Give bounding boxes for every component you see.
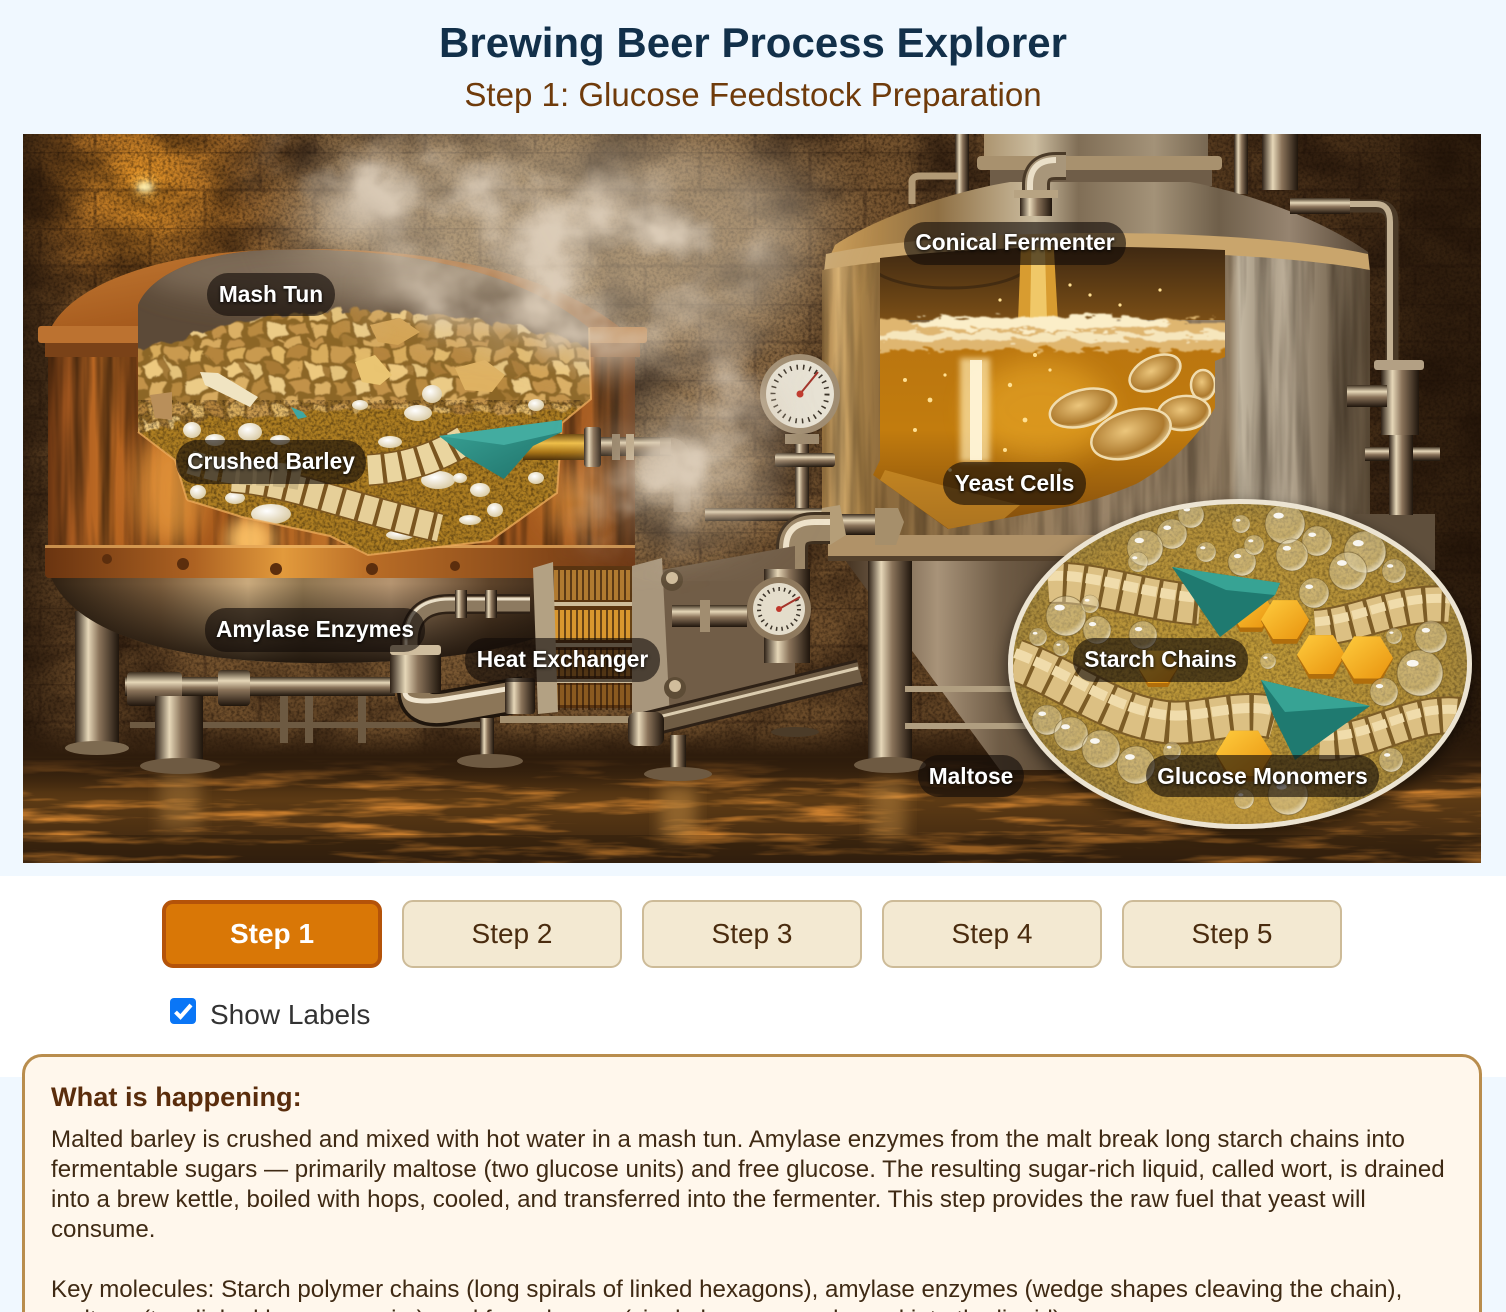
lower rivet band bbox=[45, 545, 635, 578]
panel body text: into a brew kettle, boiled with hops, cooled, and transferred into the fermenter. This step provides the raw fuel that yeast will bbox=[51, 1186, 1366, 1213]
label: Heat Exchanger bbox=[465, 638, 660, 682]
chain 3 bbox=[1015, 653, 1275, 723]
button: Step 4: Step 4 bbox=[952, 918, 1032, 949]
fermenter cone bbox=[845, 560, 1230, 770]
button: Step 1 active bbox=[162, 900, 382, 968]
white pebbles bbox=[183, 385, 544, 540]
background: brick wall bbox=[23, 134, 1481, 784]
label: Crushed Barley bbox=[176, 440, 366, 484]
label: Glucose Monomers: Glucose Monomers bbox=[1157, 763, 1368, 789]
mash window rim highlight bbox=[138, 328, 591, 555]
copper body bbox=[48, 352, 635, 555]
bubbles bbox=[1029, 502, 1447, 815]
panel body text: Key molecules: Starch polymer chains (long spirals of linked hexagons), amylase enzymes (wedge shapes cleaving the chain), bbox=[51, 1276, 1402, 1303]
stainless bowl bbox=[50, 575, 610, 663]
button: Step 3: Step 3 bbox=[712, 918, 792, 949]
label: Heat Exchanger: Heat Exchanger bbox=[477, 646, 648, 672]
label: Yeast Cells bbox=[943, 462, 1086, 505]
lens shadow and ring bbox=[1008, 499, 1472, 829]
subtitle: Step 1: Glucose Feedstock Preparation bbox=[464, 77, 1042, 114]
title: Brewing Beer Process Explorer bbox=[439, 19, 1067, 66]
panel body text: consume. bbox=[51, 1216, 155, 1243]
label: Amylase Enzymes bbox=[205, 608, 425, 652]
yeast cells bbox=[1048, 353, 1215, 461]
crushed barley bed bbox=[138, 306, 591, 434]
label: Crushed Barley: Crushed Barley bbox=[187, 448, 355, 474]
heat exchanger bbox=[533, 546, 795, 724]
enzyme wedges bbox=[1172, 567, 1370, 760]
panel heading: What is happening: bbox=[51, 1081, 302, 1112]
label: Glucose Monomers bbox=[1146, 755, 1379, 797]
chain 1 bbox=[1048, 576, 1200, 605]
illustration: brewery cutaway scene bbox=[23, 134, 1481, 863]
label: Conical Fermenter: Conical Fermenter bbox=[915, 229, 1115, 255]
controls background band bbox=[0, 876, 1506, 1077]
foam band bbox=[870, 316, 1230, 350]
button: Step 5 bbox=[1122, 900, 1342, 968]
fermenter inlet elbow bbox=[1014, 160, 1066, 216]
teal speck bbox=[291, 407, 307, 419]
floor with reflections bbox=[23, 725, 1481, 863]
panel body text: fermentable sugars — primarily maltose (two glucose units) and free glucose. The resulting sugar-rich liquid, called wort, is drained bbox=[51, 1156, 1445, 1183]
starch chains bbox=[1015, 576, 1460, 742]
copper dome bbox=[50, 249, 635, 356]
label: Maltose bbox=[918, 755, 1024, 797]
fermenter top piping bbox=[912, 134, 1298, 204]
chain 4 bbox=[1320, 709, 1460, 742]
label: Mash Tun: Mash Tun bbox=[219, 281, 323, 307]
exchanger stands and lower run bbox=[457, 668, 860, 781]
button: Step 1 active: Step 1 bbox=[230, 918, 314, 949]
label: Yeast Cells: Yeast Cells bbox=[955, 470, 1074, 496]
panel body text bbox=[51, 1126, 1445, 1312]
exchanger rear housing bbox=[650, 546, 795, 722]
chain 2 bbox=[1315, 598, 1450, 628]
label: Maltose: Maltose bbox=[929, 763, 1013, 789]
label: Amylase Enzymes: Amylase Enzymes bbox=[216, 616, 414, 642]
button: Step 5: Step 5 bbox=[1192, 918, 1272, 949]
button: Step 4 bbox=[882, 900, 1102, 968]
bubbles bbox=[903, 283, 1162, 472]
panel: what is happening bbox=[22, 1054, 1482, 1312]
label: Starch Chains bbox=[1073, 638, 1248, 682]
orange glow in beer bbox=[970, 360, 1110, 460]
steam clouds bbox=[260, 130, 830, 542]
falling wort stream bbox=[1018, 248, 1058, 318]
glucose hexagons bbox=[1138, 592, 1393, 782]
bottom band bbox=[828, 535, 1248, 560]
transfer pipe bbox=[705, 505, 904, 572]
label: Mash Tun bbox=[207, 273, 335, 316]
checkbox: show labels bbox=[170, 998, 196, 1024]
sight window with beer bbox=[873, 246, 1225, 529]
button: Step 3 bbox=[642, 900, 862, 968]
conical fermenter vessel bbox=[822, 134, 1440, 773]
side pipe and valve bbox=[1290, 198, 1440, 515]
rim bbox=[824, 233, 1370, 272]
steel body bbox=[822, 252, 1370, 555]
amylase wedge bbox=[439, 420, 562, 479]
pressure gauge dial bbox=[760, 354, 840, 434]
fermenter leg bbox=[854, 560, 1035, 773]
bright light shaft bbox=[960, 358, 990, 462]
fermenter dome bbox=[824, 182, 1370, 270]
mash tun vessel bbox=[38, 236, 682, 755]
collar rings bbox=[38, 326, 647, 357]
checkbox label: Show Labels bbox=[210, 999, 370, 1030]
button: Step 2: Step 2 bbox=[472, 918, 552, 949]
gauge and connecting pipework bbox=[125, 354, 904, 781]
button: Step 2 bbox=[402, 900, 622, 968]
lower gauge assembly bbox=[747, 569, 811, 663]
label: Starch Chains: Starch Chains bbox=[1084, 646, 1237, 672]
magnified molecular inset bbox=[1005, 498, 1475, 830]
right base skirt bbox=[1353, 514, 1435, 570]
mash tun legs bbox=[65, 611, 480, 755]
label: Conical Fermenter bbox=[904, 222, 1126, 265]
starch chains in mash bbox=[190, 440, 465, 528]
wort liquid bbox=[142, 408, 578, 555]
exchanger coils bbox=[550, 566, 634, 708]
panel body text: Malted barley is crushed and mixed with hot water in a mash tun. Amylase enzymes from the malt break long starch chains into bbox=[51, 1126, 1405, 1153]
large grain chunks bbox=[150, 318, 505, 420]
pressure gauge stem bbox=[775, 430, 835, 510]
dregs at base bbox=[880, 470, 1020, 530]
left manifold pipes bbox=[125, 590, 535, 774]
mash tun window interior bbox=[138, 250, 590, 555]
mash inlet pipe bbox=[523, 427, 682, 512]
